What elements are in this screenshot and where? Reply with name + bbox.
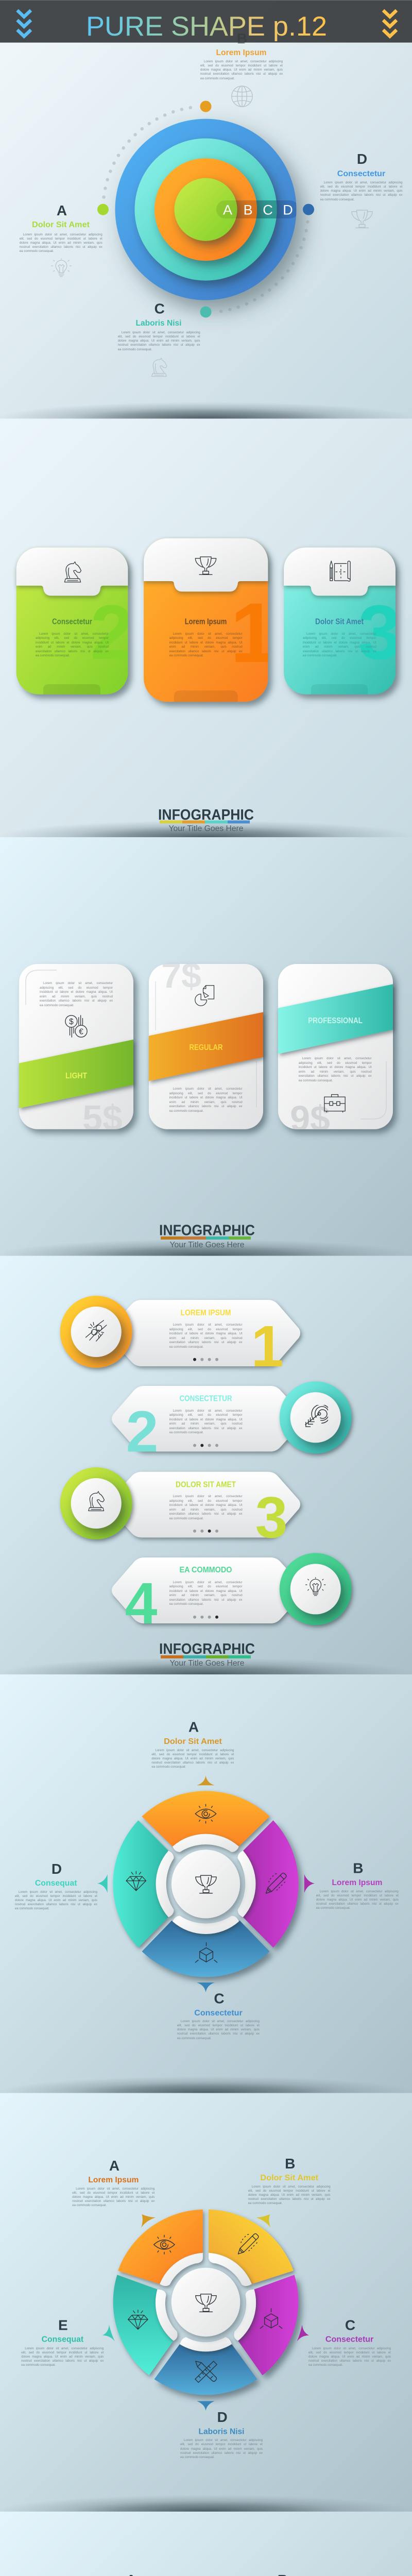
footer heading: Your Title Goes Here	[169, 824, 243, 833]
label B: Dolor Sit Amet	[260, 2174, 319, 2182]
row 3: ea commodo consequat.	[169, 1517, 203, 1520]
row 1: LOREM IPSUM	[180, 1309, 231, 1317]
label C: Lorem ipsum dolor sit amet, consectetur adipiscing	[312, 2346, 391, 2350]
text block D	[320, 151, 403, 204]
label E: nostrud exercitation ullamco laboris nisi ut aliquip ex	[21, 2359, 104, 2363]
text block B	[200, 48, 283, 82]
card: light: LIGHT	[65, 1072, 87, 1080]
text block C: Laboris Nisi	[136, 319, 181, 328]
title: PURE SHAPE p.12	[86, 11, 327, 42]
panel: section 1 concentric circles	[0, 0, 412, 418]
label A: A	[109, 2158, 119, 2174]
text block D: nostrud exercitation ullamco laboris nisi ut aliquip ex	[320, 193, 403, 197]
label E	[21, 2317, 104, 2369]
label A	[72, 2158, 154, 2210]
label D: ea commodo consequat.	[180, 2455, 215, 2459]
row 3: DOLOR SIT AMET	[176, 1481, 236, 1489]
label D: ea commodo consequat.	[15, 1907, 49, 1910]
panel: section 4 stacked arrow rows	[0, 1256, 412, 1674]
text block B: Lorem ipsum dolor sit amet, consectetur adipiscing	[204, 60, 283, 63]
card: regular: incididunt ut labore et dolore magna aliqua. Ut	[169, 1096, 243, 1099]
row 4: exercitation ullamco laboris nisi ut aliquip ex	[169, 1598, 243, 1602]
panel: section 5 four-part wheel	[0, 1674, 412, 2093]
card: regular: REGULAR	[190, 1043, 223, 1052]
letter B partly behind header: B	[237, 30, 247, 46]
arrows	[97, 1776, 315, 1992]
card: Lorem Ipsum: Lorem ipsum dolor sit amet, consectetur	[173, 632, 243, 636]
icon: diamond	[128, 2310, 148, 2329]
text block A	[20, 202, 102, 256]
wheel	[113, 2210, 298, 2395]
footer heading: INFOGRAPHIC	[159, 1641, 255, 1657]
icon: target	[305, 1404, 331, 1427]
label D	[15, 1861, 97, 1913]
icon: bulb	[52, 259, 71, 277]
text block D: elit, sed do eiusmod tempor incididunt ut labore et	[320, 185, 403, 189]
header banner	[0, 0, 412, 43]
card: Lorem Ipsum: adipiscing elit, sed do eiusmod tempor	[169, 636, 243, 640]
label D: Laboris Nisi	[199, 2427, 244, 2436]
label D: dolore magna aliqua. Ut enim ad minim veniam, quis	[180, 2447, 263, 2450]
icon: cube	[260, 2309, 282, 2328]
text block A: A	[57, 202, 67, 218]
number 1: 1	[230, 585, 278, 680]
label B: elit, sed do eiusmod tempor incididunt ut labore et	[248, 2189, 331, 2193]
label B: nostrud exercitation ullamco laboris nisi ut aliquip ex	[248, 2197, 331, 2201]
card: Consectetur: adipiscing elit, sed do eiusmod tempor	[36, 636, 109, 640]
row 3: Lorem ipsum dolor sit amet, consectetur	[173, 1495, 243, 1498]
icon: tools	[195, 2361, 217, 2382]
icon: trophy	[196, 2294, 216, 2312]
card: professional: PROFESSIONAL	[308, 1016, 363, 1025]
row 2: 2	[126, 1399, 158, 1464]
card: light: incididunt ut labore et dolore magna aliqua. Ut	[40, 990, 113, 994]
card: professional: incididunt ut labore et dolore magna aliqua. Ut	[299, 1065, 372, 1069]
card: light	[19, 964, 133, 1138]
icon: knight	[64, 562, 81, 582]
icon: trophy	[352, 210, 372, 228]
row 4: Lorem ipsum dolor sit amet, consectetur	[173, 1581, 243, 1584]
card: regular: adipiscing elit, sed do eiusmod tempor	[169, 1091, 243, 1095]
card: light: ea commodo consequat.	[40, 1004, 74, 1007]
row 1: enim ad minim veniam, quis nostrud	[169, 1336, 243, 1340]
row 1: Lorem ipsum dolor sit amet, consectetur	[173, 1323, 243, 1327]
label E: ea commodo consequat.	[21, 2363, 56, 2367]
panel: section 6 five-part wheel	[0, 2093, 412, 2512]
card: Dolor Sit Amet	[284, 548, 401, 694]
number 2: 2	[90, 589, 133, 675]
row 4: ea commodo consequat.	[169, 1602, 203, 1606]
row 2: adipiscing elit, sed do eiusmod tempor	[169, 1413, 243, 1417]
concentric discs: A	[223, 202, 232, 217]
label A: elit, sed do eiusmod tempor incididunt ut labore et	[72, 2191, 154, 2195]
row 1: ea commodo consequat.	[169, 1345, 203, 1349]
icon: blueprint	[330, 561, 350, 581]
icon: knight	[89, 1492, 104, 1511]
row 2: incididunt ut labore et dolore magna aliqua. Ut	[169, 1418, 243, 1421]
label A: ea commodo consequat.	[72, 2204, 107, 2207]
card: regular: 7$	[161, 955, 201, 995]
label B: elit, sed do eiusmod tempor incididunt ut labore et	[316, 1894, 399, 1897]
card: Consectetur	[16, 548, 133, 694]
text block D: D	[357, 151, 367, 167]
label C	[177, 1990, 260, 2042]
footer heading: Your Title Goes Here	[170, 1241, 244, 1249]
card: Dolor Sit Amet: ea commodo consequat.	[303, 654, 337, 657]
row 3	[60, 1467, 300, 1550]
label D: Consequat	[35, 1879, 77, 1888]
label A: nostrud exercitation ullamco laboris nisi ut aliquip ex	[151, 1761, 234, 1765]
card: light: Lorem ipsum dolor sit amet, consectetur	[43, 981, 113, 985]
label C: dolore magna aliqua. Ut enim ad minim veniam, quis	[308, 2355, 391, 2359]
card: regular	[149, 955, 263, 1129]
card: regular: ea commodo consequat.	[169, 1109, 203, 1113]
row 4: 4	[125, 1571, 158, 1636]
card: regular: enim ad minim veniam, quis nostrud	[169, 1100, 243, 1104]
row 1: incididunt ut labore et dolore magna aliqua. Ut	[169, 1332, 243, 1335]
card: light: 5$	[82, 1098, 123, 1138]
label C: Lorem ipsum dolor sit amet, consectetur adipiscing	[181, 2020, 260, 2023]
row 4: enim ad minim veniam, quis nostrud	[169, 1594, 243, 1597]
card: regular: exercitation ullamco laboris nisi ut aliquip ex	[169, 1105, 243, 1108]
text block C: C	[154, 301, 165, 316]
row 2: ea commodo consequat.	[169, 1431, 203, 1434]
label B: Lorem ipsum dolor sit amet, consectetur adipiscing	[252, 2185, 331, 2189]
text block C	[118, 301, 200, 353]
row 3: incididunt ut labore et dolore magna aliqua. Ut	[169, 1503, 243, 1507]
card: Dolor Sit Amet: incididunt ut labore et dolore magna aliqua. Ut	[303, 641, 376, 645]
row 4: adipiscing elit, sed do eiusmod tempor	[169, 1585, 243, 1588]
label C: dolore magna aliqua. Ut enim ad minim veniam, quis	[177, 2028, 260, 2031]
dotted orbit	[104, 108, 307, 311]
label A: Lorem Ipsum	[88, 2176, 139, 2184]
text block A: Lorem ipsum dolor sit amet, consectetur adipiscing	[23, 233, 102, 236]
label D: nostrud exercitation ullamco laboris nisi ut aliquip ex	[15, 1903, 97, 1906]
card: Dolor Sit Amet: Dolor Sit Amet	[315, 617, 364, 626]
label B: Lorem ipsum dolor sit amet, consectetur adipiscing	[320, 1890, 399, 1893]
label D: D	[217, 2409, 228, 2425]
card: Consectetur: ea commodo consequat.	[36, 654, 70, 657]
icon: diamond	[126, 1871, 146, 1891]
label B: Lorem Ipsum	[332, 1878, 382, 1887]
footer heading	[159, 1222, 255, 1249]
label B: dolore magna aliqua. Ut enim ad minim veniam, quis	[316, 1898, 399, 1902]
text block B: dolore magna aliqua. Ut enim ad minim veniam, quis	[200, 68, 283, 72]
number 3: 3	[358, 589, 401, 675]
arrows	[102, 2214, 309, 2411]
card: Dolor Sit Amet: enim ad minim veniam, quis nostrud	[303, 645, 376, 649]
icon: trophy	[195, 557, 216, 574]
text block A: Dolor Sit Amet	[32, 221, 90, 229]
label B: nostrud exercitation ullamco laboris nisi ut aliquip ex	[316, 1902, 399, 1906]
card: regular: Lorem ipsum dolor sit amet, consectetur	[173, 1087, 243, 1091]
icon: knight	[152, 358, 167, 377]
text block D: dolore magna aliqua. Ut enim ad minim veniam, quis	[320, 189, 403, 193]
label B: dolore magna aliqua. Ut enim ad minim veniam, quis	[248, 2193, 331, 2197]
label D: D	[52, 1861, 62, 1877]
card: professional: exercitation ullamco laboris nisi ut aliquip ex	[299, 1074, 372, 1078]
row 2: enim ad minim veniam, quis nostrud	[169, 1422, 243, 1426]
row 3: 3	[255, 1485, 287, 1550]
label D: elit, sed do eiusmod tempor incididunt ut labore et	[180, 2443, 263, 2446]
text block D: Consectetur	[337, 170, 385, 178]
row 3: enim ad minim veniam, quis nostrud	[169, 1508, 243, 1512]
panel: section 3 pricing cards	[0, 837, 412, 1256]
card: Dolor Sit Amet: adipiscing elit, sed do eiusmod tempor	[303, 636, 376, 640]
text block C: Lorem ipsum dolor sit amet, consectetur adipiscing	[122, 331, 200, 334]
label C: elit, sed do eiusmod tempor incididunt ut labore et	[308, 2351, 391, 2354]
label A: nostrud exercitation ullamco laboris nisi ut aliquip ex	[72, 2199, 154, 2203]
label C: nostrud exercitation ullamco laboris nisi ut aliquip ex	[308, 2359, 391, 2363]
label E: dolore magna aliqua. Ut enim ad minim veniam, quis	[21, 2355, 104, 2359]
card: Lorem Ipsum: ea commodo consequat.	[169, 654, 203, 657]
label E: Consequat	[42, 2335, 84, 2344]
label C: C	[345, 2317, 355, 2333]
label C: Consectetur	[194, 2009, 243, 2018]
card: Dolor Sit Amet: Lorem ipsum dolor sit amet, consectetur	[306, 632, 376, 636]
card: Consectetur: Consectetur	[52, 617, 92, 626]
icon: money	[65, 1015, 87, 1037]
footer heading	[158, 807, 254, 833]
icon: eye	[195, 1804, 216, 1823]
icon: left chevrons	[18, 10, 31, 36]
icon: bulb	[306, 1578, 325, 1596]
concentric discs: C	[263, 202, 273, 217]
card: Consectetur: exercitation ullamco laboris nisi ut aliquip ex	[36, 650, 109, 653]
label A: dolore magna aliqua. Ut enim ad minim veniam, quis	[151, 1757, 234, 1760]
row 4: incididunt ut labore et dolore magna aliqua. Ut	[169, 1589, 243, 1593]
label A: Lorem ipsum dolor sit amet, consectetur adipiscing	[155, 1749, 234, 1752]
footer heading	[159, 1641, 255, 1668]
text block B: Lorem Ipsum	[216, 48, 267, 57]
icon: briefcase	[324, 1094, 345, 1112]
row 2: Lorem ipsum dolor sit amet, consectetur	[173, 1409, 243, 1413]
card: Consectetur: enim ad minim veniam, quis nostrud	[36, 645, 109, 649]
label D: Lorem ipsum dolor sit amet, consectetur adipiscing	[19, 1890, 97, 1894]
card: professional: Lorem ipsum dolor sit amet, consectetur	[302, 1057, 372, 1060]
label D: elit, sed do eiusmod tempor incididunt ut labore et	[15, 1894, 97, 1898]
text block C: elit, sed do eiusmod tempor incididunt ut labore et	[118, 335, 200, 338]
card: Consectetur: incididunt ut labore et dolore magna aliqua. Ut	[36, 641, 109, 645]
icon: eye	[154, 2235, 175, 2254]
label B: ea commodo consequat.	[316, 1906, 351, 1910]
row 2: CONSECTETUR	[179, 1394, 232, 1403]
row 3: exercitation ullamco laboris nisi ut aliquip ex	[169, 1512, 243, 1516]
label C: ea commodo consequat.	[177, 2037, 212, 2040]
label A: A	[188, 1719, 199, 1735]
label D: nostrud exercitation ullamco laboris nisi ut aliquip ex	[180, 2451, 263, 2455]
label B: B	[353, 1860, 364, 1876]
card: Dolor Sit Amet: exercitation ullamco laboris nisi ut aliquip ex	[303, 650, 376, 653]
card: light: enim ad minim veniam, quis nostrud	[40, 994, 113, 998]
text block C: nostrud exercitation ullamco laboris nisi ut aliquip ex	[118, 343, 200, 347]
text block B: nostrud exercitation ullamco laboris nisi ut aliquip ex	[200, 72, 283, 76]
text block A: dolore magna aliqua. Ut enim ad minim veniam, quis	[20, 241, 102, 245]
row 1: exercitation ullamco laboris nisi ut aliquip ex	[169, 1341, 243, 1344]
row 4: EA COMMODO	[179, 1566, 232, 1574]
card: Lorem Ipsum: Lorem Ipsum	[185, 617, 227, 626]
label C: C	[214, 1990, 225, 2006]
row 3: adipiscing elit, sed do eiusmod tempor	[169, 1499, 243, 1503]
icon: globe	[232, 86, 252, 107]
icon: right chevrons	[383, 10, 397, 36]
text block A: ea commodo consequat.	[20, 249, 54, 253]
concentric discs	[115, 119, 299, 300]
label B	[316, 1860, 399, 1912]
concentric discs: B	[244, 202, 253, 217]
orbit nodes	[97, 101, 314, 317]
text block B: elit, sed do eiusmod tempor incididunt ut labore et	[200, 64, 283, 67]
label B: ea commodo consequat.	[248, 2201, 282, 2205]
card: professional	[278, 964, 393, 1139]
label A: elit, sed do eiusmod tempor incididunt ut labore et	[151, 1753, 234, 1756]
panel: section 7 six-part wheel	[0, 2512, 412, 2576]
row 1	[60, 1296, 300, 1379]
text block D: Lorem ipsum dolor sit amet, consectetur adipiscing	[323, 181, 403, 184]
icon: pencil	[238, 2234, 259, 2254]
label C: Consectetur	[325, 2335, 373, 2344]
label C: elit, sed do eiusmod tempor incididunt ut labore et	[177, 2024, 260, 2027]
label D	[180, 2409, 263, 2461]
label A: dolore magna aliqua. Ut enim ad minim veniam, quis	[72, 2195, 154, 2199]
footer heading: INFOGRAPHIC	[159, 1222, 255, 1239]
card: Lorem Ipsum: incididunt ut labore et dolore magna aliqua. Ut	[169, 641, 243, 645]
text block D: ea commodo consequat.	[320, 198, 354, 201]
card: professional: ea commodo consequat.	[299, 1079, 333, 1082]
text block A: elit, sed do eiusmod tempor incididunt ut labore et	[20, 237, 102, 241]
card: Lorem Ipsum	[144, 538, 278, 702]
label B: B	[285, 2156, 295, 2172]
row 4	[112, 1553, 352, 1636]
footer heading: INFOGRAPHIC	[158, 807, 254, 823]
row 2: exercitation ullamco laboris nisi ut aliquip ex	[169, 1427, 243, 1430]
label E: E	[58, 2317, 68, 2333]
card: professional: 9$	[290, 1098, 330, 1139]
icon: trophy	[196, 1875, 216, 1893]
wheel	[113, 1791, 299, 1977]
icon: cube	[195, 1943, 217, 1962]
icon: chart	[195, 986, 214, 1006]
label D: dolore magna aliqua. Ut enim ad minim veniam, quis	[15, 1899, 97, 1902]
card: light: exercitation ullamco laboris nisi ut aliquip ex	[40, 999, 113, 1003]
label C: nostrud exercitation ullamco laboris nisi ut aliquip ex	[177, 2032, 260, 2036]
row 2	[112, 1381, 352, 1464]
concentric discs: D	[283, 202, 293, 217]
label B	[248, 2156, 331, 2208]
text block A: nostrud exercitation ullamco laboris nisi ut aliquip ex	[20, 245, 102, 249]
label E: Lorem ipsum dolor sit amet, consectetur adipiscing	[25, 2346, 104, 2350]
label A: ea commodo consequat.	[151, 1765, 186, 1769]
card: Consectetur: Lorem ipsum dolor sit amet, consectetur	[39, 632, 109, 636]
icon: broken link	[86, 1320, 107, 1341]
card: light: adipiscing elit, sed do eiusmod tempor	[40, 986, 113, 989]
label C: ea commodo consequat.	[308, 2363, 343, 2367]
label A	[151, 1719, 234, 1771]
label A: Lorem ipsum dolor sit amet, consectetur adipiscing	[76, 2187, 154, 2191]
footer heading: Your Title Goes Here	[170, 1659, 244, 1668]
row 1: 1	[251, 1314, 283, 1379]
label C	[308, 2317, 391, 2369]
label D: Lorem ipsum dolor sit amet, consectetur adipiscing	[184, 2438, 263, 2442]
label E: elit, sed do eiusmod tempor incididunt ut labore et	[21, 2351, 104, 2354]
label A: Dolor Sit Amet	[164, 1737, 222, 1746]
text block C: ea commodo consequat.	[118, 348, 152, 351]
card: Lorem Ipsum: enim ad minim veniam, quis nostrud	[169, 645, 243, 649]
card: professional: enim ad minim veniam, quis nostrud	[299, 1070, 372, 1074]
card: professional: adipiscing elit, sed do eiusmod tempor	[299, 1061, 372, 1064]
row 1: adipiscing elit, sed do eiusmod tempor	[169, 1327, 243, 1331]
text block B: ea commodo consequat.	[200, 77, 235, 80]
icon: pencil	[266, 1873, 286, 1893]
panel: section 2 three cards	[0, 418, 412, 837]
card: Lorem Ipsum: exercitation ullamco laboris nisi ut aliquip ex	[169, 650, 243, 653]
text block C: dolore magna aliqua. Ut enim ad minim veniam, quis	[118, 339, 200, 343]
